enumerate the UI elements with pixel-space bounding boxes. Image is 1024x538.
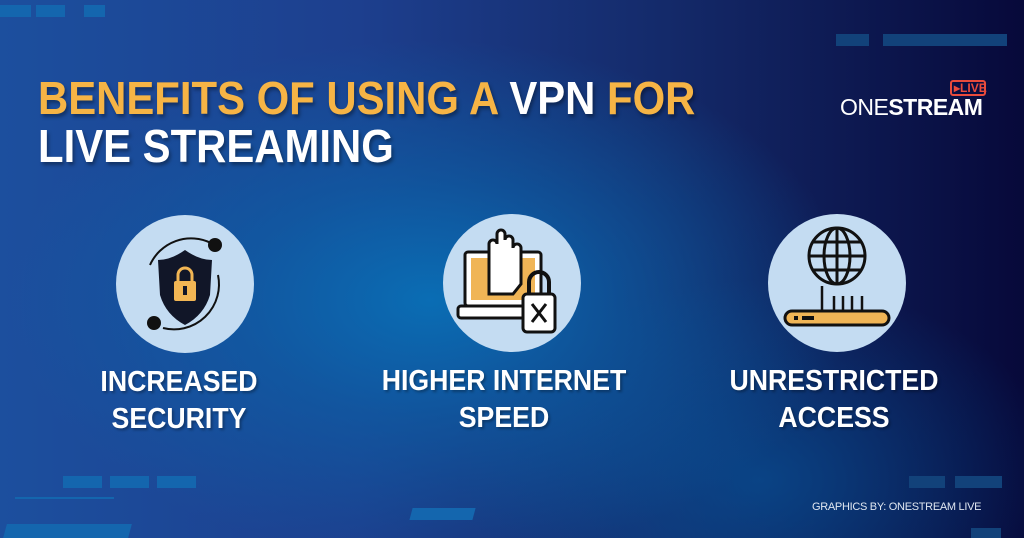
logo bbox=[840, 80, 987, 120]
label: higher internet speed bbox=[382, 365, 629, 434]
label: unrestricted access: ACCESS bbox=[778, 402, 890, 434]
label: higher internet speed: SPEED bbox=[459, 402, 549, 434]
icon: globe router bbox=[768, 214, 906, 352]
title: LIVE STREAMING bbox=[38, 120, 394, 172]
label: unrestricted access: UNRESTRICTED bbox=[729, 365, 938, 397]
logo badge: ▸LIVE bbox=[954, 81, 987, 95]
title: BENEFITS OF USING A VPN FOR bbox=[38, 72, 695, 124]
label: increased security bbox=[100, 366, 260, 435]
label: increased security: SECURITY bbox=[112, 403, 246, 435]
credit: GRAPHICS BY: ONESTREAM LIVE bbox=[812, 501, 981, 513]
icon: laptop lock bbox=[443, 214, 581, 352]
label: higher internet speed: HIGHER INTERNET bbox=[382, 365, 626, 397]
label: increased security: INCREASED bbox=[100, 366, 258, 398]
label: unrestricted access bbox=[729, 365, 940, 434]
title bbox=[38, 72, 696, 172]
icon: shield bbox=[116, 215, 254, 353]
logo text: ONESTREAM bbox=[840, 94, 982, 120]
